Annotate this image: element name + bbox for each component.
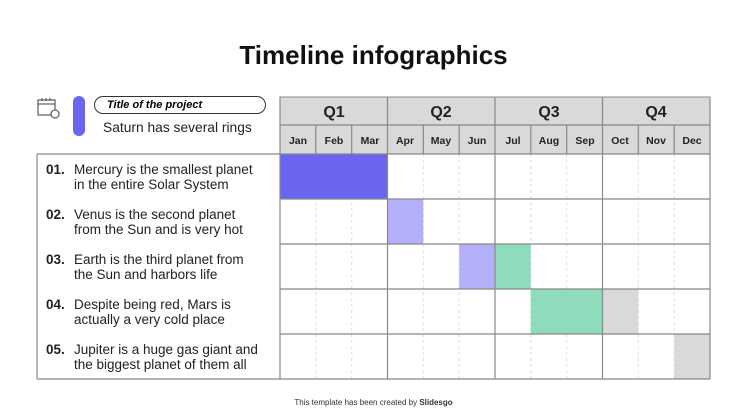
gantt chart: Dec xyxy=(682,135,702,147)
task 01 xyxy=(46,162,253,192)
text: Jupiter is a huge gas giant and xyxy=(74,342,258,357)
project title pill: Title of the project xyxy=(107,99,202,111)
task 05: 05. xyxy=(46,342,65,357)
text: Earth is the third planet from xyxy=(74,252,244,267)
project title pill xyxy=(94,96,266,114)
task 03: 03. xyxy=(46,252,65,267)
text: Venus is the second planet xyxy=(74,207,235,222)
footer credit: This template has been created by Slidesgo xyxy=(294,398,453,407)
task 04: 04. xyxy=(46,297,65,312)
gantt chart: Feb xyxy=(325,135,343,147)
text: actually a very cold place xyxy=(74,312,225,327)
gantt chart: Mar xyxy=(361,135,379,147)
gantt chart: Q4 xyxy=(645,104,667,121)
text: in the entire Solar System xyxy=(74,177,229,192)
task 03 xyxy=(46,252,244,282)
gantt chart: Sep xyxy=(575,135,595,147)
gantt chart: Apr xyxy=(396,135,414,147)
task 04 xyxy=(46,297,231,327)
icon: calendar xyxy=(37,98,60,119)
subtitle: Saturn has several rings xyxy=(103,120,252,135)
gantt chart: Jun xyxy=(468,135,486,147)
title: Timeline infographics xyxy=(239,40,508,70)
accent pill xyxy=(73,96,85,136)
text: the biggest planet of them all xyxy=(74,357,247,372)
gantt chart: Aug xyxy=(539,135,559,147)
task 02: 02. xyxy=(46,207,65,222)
task 05 xyxy=(46,342,258,372)
text: Mercury is the smallest planet xyxy=(74,162,253,177)
gantt chart: May xyxy=(431,135,451,147)
gantt chart: Jul xyxy=(505,135,521,147)
gantt chart: Oct xyxy=(611,135,629,147)
gantt chart: Q1 xyxy=(323,104,345,121)
gantt chart: Q2 xyxy=(430,104,452,121)
bars xyxy=(280,154,710,379)
text: the Sun and harbors life xyxy=(74,267,217,282)
gantt chart: Nov xyxy=(646,135,666,147)
text: from the Sun and is very hot xyxy=(74,222,243,237)
gantt chart: Jan xyxy=(289,135,307,147)
task 01: 01. xyxy=(46,162,65,177)
text: Despite being red, Mars is xyxy=(74,297,231,312)
gantt chart: Q3 xyxy=(538,104,560,121)
task 02 xyxy=(46,207,243,237)
